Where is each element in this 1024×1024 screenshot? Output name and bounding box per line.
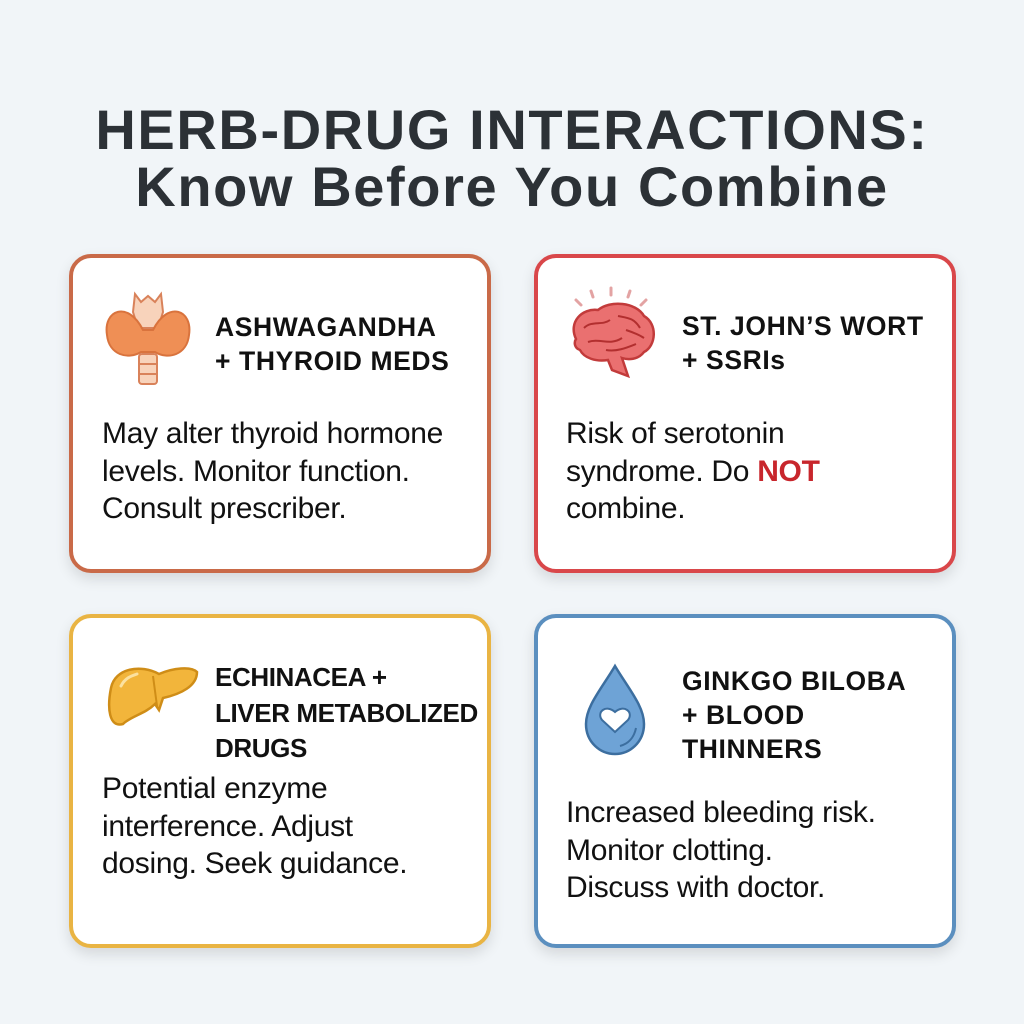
body text: May alter thyroid hormone xyxy=(102,417,443,450)
icon: liver xyxy=(108,667,198,726)
panel: echinacea xyxy=(69,614,491,948)
body text: combine. xyxy=(566,492,685,525)
body text: levels. Monitor function. xyxy=(102,454,410,488)
body text: dosing. Seek guidance. xyxy=(102,847,407,880)
title: Know Before You Combine xyxy=(135,155,889,218)
body text: Risk of serotonin xyxy=(566,417,784,450)
body text xyxy=(566,796,876,904)
icon: thyroid xyxy=(106,292,190,385)
heading: + SSRIs xyxy=(682,345,786,375)
heading: THINNERS xyxy=(682,734,822,764)
heading: + THYROID MEDS xyxy=(215,346,449,376)
panel: ashwagandha xyxy=(69,254,491,573)
heading xyxy=(215,312,449,376)
body text xyxy=(102,772,407,880)
body text xyxy=(566,417,820,525)
panel: st johns wort xyxy=(534,254,956,573)
icon: blood drop xyxy=(584,664,646,756)
body text: Monitor clotting. xyxy=(566,834,773,866)
heading: + BLOOD xyxy=(682,700,805,730)
heading: DRUGS xyxy=(215,733,307,763)
panel: ginkgo xyxy=(534,614,956,948)
body text: Discuss with doctor. xyxy=(566,871,825,904)
body text: syndrome. Do NOT xyxy=(566,454,820,488)
heading: ASHWAGANDHA xyxy=(215,312,437,342)
body text: Increased bleeding risk. xyxy=(566,796,876,829)
heading xyxy=(682,666,906,764)
title: HERB-DRUG INTERACTIONS: xyxy=(95,98,929,161)
title xyxy=(95,98,929,218)
body text: Consult prescriber. xyxy=(102,492,346,525)
heading: GINKGO BILOBA xyxy=(682,666,906,696)
body text: interference. Adjust xyxy=(102,810,353,842)
heading xyxy=(215,662,478,763)
body text xyxy=(102,417,443,525)
icon: brain xyxy=(572,286,655,378)
heading: LIVER METABOLIZED xyxy=(215,698,478,728)
heading xyxy=(682,311,924,375)
body text: Potential enzyme xyxy=(102,772,327,805)
heading: ECHINACEA + xyxy=(215,662,387,692)
heading: ST. JOHN’S WORT xyxy=(682,311,924,341)
